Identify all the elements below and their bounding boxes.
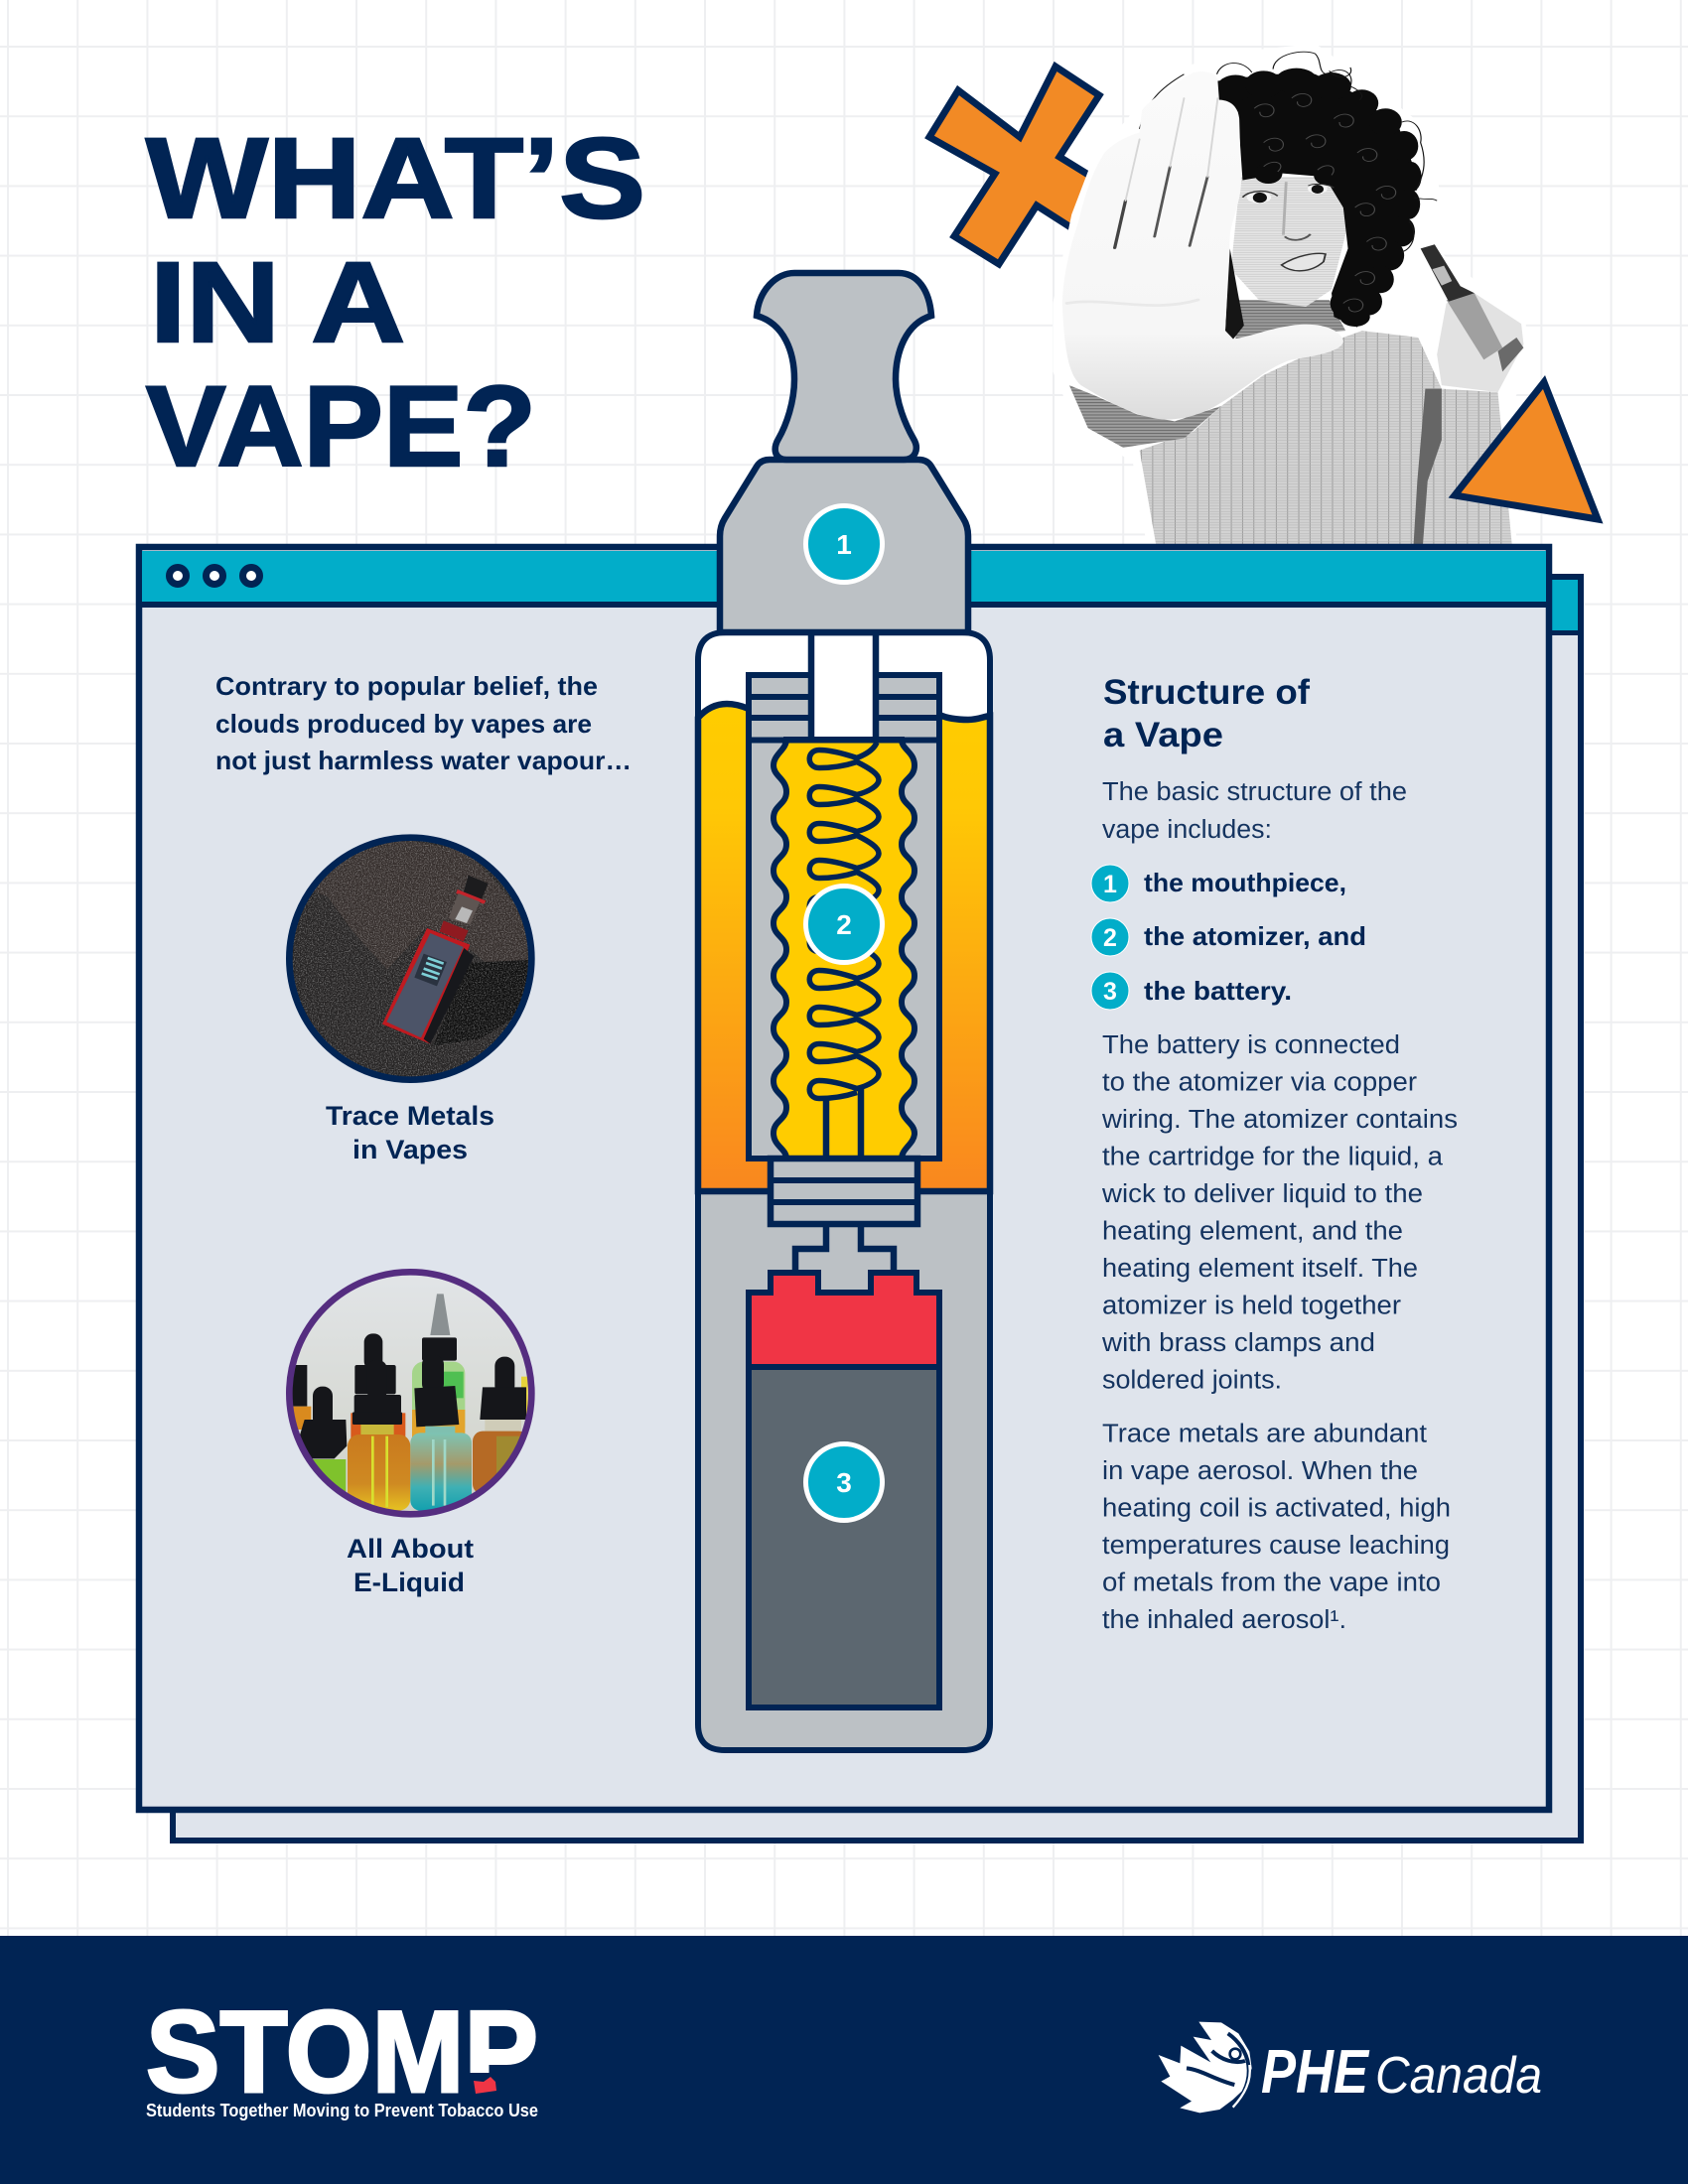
text: battery paragraph: wick to deliver liquid to the — [1101, 1180, 1423, 1208]
text: trace metals paragraph: of metals from the vape into — [1102, 1569, 1441, 1596]
front teal bottle — [410, 1355, 472, 1511]
list item 3: the battery. — [1144, 976, 1292, 1006]
text: trace metals paragraph — [1102, 1420, 1451, 1634]
panel: front window — [139, 547, 1549, 1810]
intro text: Contrary to popular belief, the — [215, 671, 598, 701]
heading: structure of a vape: a Vape — [1103, 716, 1223, 754]
text: battery paragraph: wiring. The atomizer contains — [1101, 1106, 1458, 1134]
logo: STOMP: STOMP — [146, 1986, 538, 2116]
mouthpiece — [757, 273, 931, 460]
battery terminals — [749, 1273, 939, 1367]
heating coil — [809, 743, 879, 1098]
caption: trace metals — [326, 1101, 494, 1164]
text: trace metals paragraph: heating coil is activated, high — [1102, 1495, 1451, 1523]
text: battery paragraph: heating element, and the — [1102, 1217, 1403, 1245]
intro text — [215, 671, 632, 775]
text: battery paragraph: The battery is connected — [1102, 1031, 1400, 1059]
text: trace metals paragraph: in vape aerosol. When the — [1102, 1457, 1418, 1485]
logo: PHE Canada: Canada — [1375, 2047, 1542, 2105]
text: battery paragraph — [1101, 1031, 1458, 1394]
eyes, nose and mouth — [1242, 182, 1334, 271]
intro text: clouds produced by vapes are — [215, 709, 592, 739]
battery cell — [749, 1367, 939, 1707]
speckle texture — [292, 841, 528, 1076]
e-liquid — [698, 704, 990, 1191]
photo: e-liquid bottles — [285, 1268, 536, 1519]
icon: orange X — [929, 67, 1127, 264]
text: battery paragraph: atomizer is held together — [1102, 1293, 1402, 1320]
sweater — [1140, 331, 1512, 544]
back orange bottle — [351, 1333, 405, 1438]
title — [146, 115, 645, 490]
marker 3: 3 — [836, 1467, 852, 1498]
wick — [774, 740, 914, 1159]
collar — [720, 460, 968, 632]
panel: back window — [173, 577, 1581, 1841]
title: WHAT’S — [146, 115, 645, 242]
list item 1: the mouthpiece, — [1144, 868, 1346, 897]
photo: vape on dark rocks — [285, 831, 536, 1089]
small hand with vape — [1421, 244, 1523, 392]
hair — [1140, 52, 1437, 328]
list item 3: 3 — [1103, 978, 1117, 1006]
pale backdrop — [296, 1297, 528, 1511]
text: battery paragraph: soldered joints. — [1102, 1366, 1282, 1394]
caption: trace metals: Trace Metals — [326, 1101, 494, 1131]
text: trace metals paragraph: Trace metals are abundant — [1102, 1420, 1427, 1447]
threaded connector — [771, 1159, 917, 1224]
red tag on P — [467, 2073, 501, 2097]
list item 2: 2 — [1103, 924, 1117, 952]
text: battery paragraph: to the atomizer via copper — [1102, 1068, 1418, 1096]
caption: e-liquid: E-Liquid — [353, 1568, 465, 1597]
text: structure intro: vape includes: — [1102, 816, 1272, 844]
sweater arm shadow — [1414, 389, 1442, 544]
window control dots — [169, 568, 260, 584]
rock shadow — [434, 960, 533, 1045]
list item 3 — [1091, 972, 1292, 1010]
connector stem — [795, 1224, 894, 1275]
text: trace metals paragraph: temperatures cause leaching — [1102, 1532, 1450, 1560]
hand shadow strip — [1225, 248, 1244, 340]
marker 2 — [806, 886, 882, 963]
circle border — [289, 838, 531, 1080]
heading: structure of a vape — [1103, 673, 1310, 754]
vape device — [382, 876, 489, 1044]
battery housing — [698, 1191, 990, 1750]
caption: e-liquid: All About — [347, 1534, 474, 1564]
list item 1: 1 — [1103, 871, 1117, 898]
atomizer cartridge — [749, 675, 939, 1159]
heading: structure of a vape: Structure of — [1103, 673, 1310, 712]
far-left bottle — [292, 1365, 311, 1430]
cartridge divider lines over wick — [749, 741, 939, 1159]
coil wires — [826, 1089, 861, 1159]
air tube — [811, 632, 876, 741]
list item 1 — [1091, 865, 1346, 902]
window title bar — [142, 551, 1546, 602]
photo: woman holding up her hand and a vape — [1053, 44, 1526, 544]
text: trace metals paragraph: the inhaled aerosol¹. — [1102, 1606, 1346, 1634]
finger gaps — [1067, 98, 1217, 306]
front orange bottle — [348, 1360, 410, 1511]
caption: trace metals: in Vapes — [352, 1135, 468, 1164]
rock — [311, 839, 533, 970]
turtleneck — [1235, 300, 1345, 340]
marker 1 — [806, 506, 882, 582]
maple leaf emblem — [1159, 2022, 1252, 2113]
text: structure intro — [1102, 778, 1407, 844]
footer band — [0, 1936, 1688, 2184]
list item 2: the atomizer, and — [1144, 921, 1366, 951]
logo: PHE Canada — [1159, 2022, 1542, 2113]
left bottle — [299, 1387, 347, 1492]
caption: e-liquid — [347, 1534, 474, 1597]
marker 2: 2 — [836, 909, 852, 940]
text: structure intro: The basic structure of the — [1102, 778, 1407, 806]
text: battery paragraph: heating element itself. The — [1102, 1255, 1418, 1283]
numbered list — [1091, 865, 1366, 1010]
back green bottle — [412, 1294, 465, 1437]
tagline: Students Together Moving to Prevent Tobacco Use — [146, 2101, 538, 2120]
right amber bottle — [473, 1357, 529, 1494]
logo: PHE Canada: PHE — [1261, 2038, 1369, 2107]
photo halo — [1053, 44, 1526, 544]
title: VAPE? — [146, 363, 536, 490]
marker 1: 1 — [836, 529, 852, 560]
icon: orange triangle — [1455, 382, 1598, 519]
tank upper air space — [698, 632, 990, 725]
vape cross-section diagram — [698, 273, 990, 1750]
title: IN A — [150, 239, 405, 366]
marker 3 — [806, 1443, 882, 1521]
text: battery paragraph: the cartridge for the liquid, a — [1102, 1144, 1444, 1171]
circle border — [289, 1272, 531, 1514]
list item 2 — [1091, 918, 1366, 956]
text: battery paragraph: with brass clamps and — [1101, 1329, 1375, 1357]
face — [1231, 177, 1348, 307]
intro text: not just harmless water vapour… — [215, 746, 632, 775]
raised hand — [1062, 71, 1343, 420]
sleeve shadow — [1069, 385, 1221, 448]
dark sand backdrop — [292, 841, 514, 1076]
